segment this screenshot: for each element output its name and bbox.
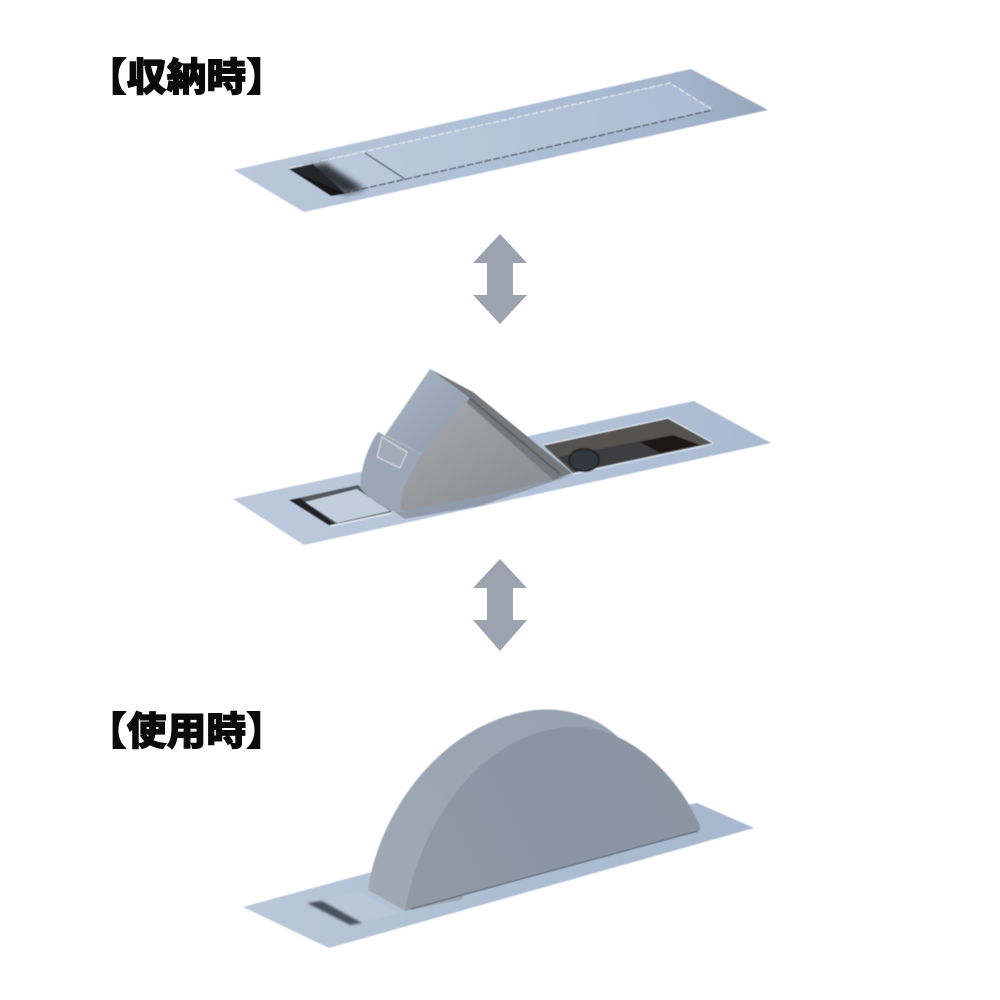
latch tab [377,437,407,468]
lower curved face [360,432,424,512]
cable ring [569,449,599,471]
heading: 使用時: 【使用時】 [87,711,286,754]
base plate [243,803,754,948]
base plate [233,401,771,545]
recess edges [290,83,713,168]
arrow: up and down [473,559,527,651]
arrow: up and down [473,234,527,324]
opening shadow [303,163,365,194]
shadow on plate below housing [395,475,572,519]
lid divider line [365,153,405,179]
dark opening [289,164,345,195]
front triangular face [400,401,553,511]
heading: 収納時: 【収納時】 [87,57,286,100]
product: in-use state [243,709,754,948]
base shadow line [411,831,698,909]
product: half-open state [233,369,771,545]
upper sloped face [385,369,470,455]
top strip of the housing [430,369,572,480]
inner cavity [558,435,700,472]
recess lid [290,83,713,195]
slot shadow [307,901,362,925]
product: stored state plate [234,69,768,212]
right opening [543,418,713,473]
left lid [305,489,390,523]
dome front [405,727,700,911]
small lid [322,891,398,922]
left recess [289,485,392,526]
dome side [368,709,619,911]
